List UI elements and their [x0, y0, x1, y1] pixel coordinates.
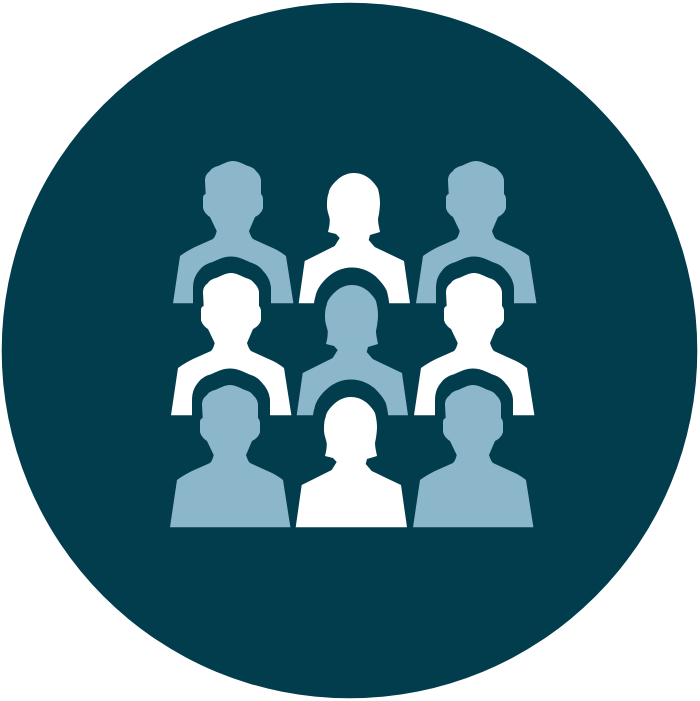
person: top left man	[173, 161, 293, 303]
person: middle centre woman	[297, 285, 408, 415]
row 3 of people	[170, 380, 533, 527]
person: middle right man	[414, 273, 534, 415]
person: bottom centre woman	[296, 397, 407, 527]
row 2 of people	[171, 268, 534, 415]
outline: row 3 head cutouts	[204, 380, 502, 440]
row 1 of people	[173, 161, 536, 303]
person: bottom left man	[170, 385, 290, 527]
person: top right man	[416, 161, 536, 303]
outline: row 2 head cutouts	[204, 268, 502, 328]
person: middle left man	[171, 273, 291, 415]
person: bottom right man	[413, 385, 533, 527]
person: top centre woman	[299, 173, 410, 303]
